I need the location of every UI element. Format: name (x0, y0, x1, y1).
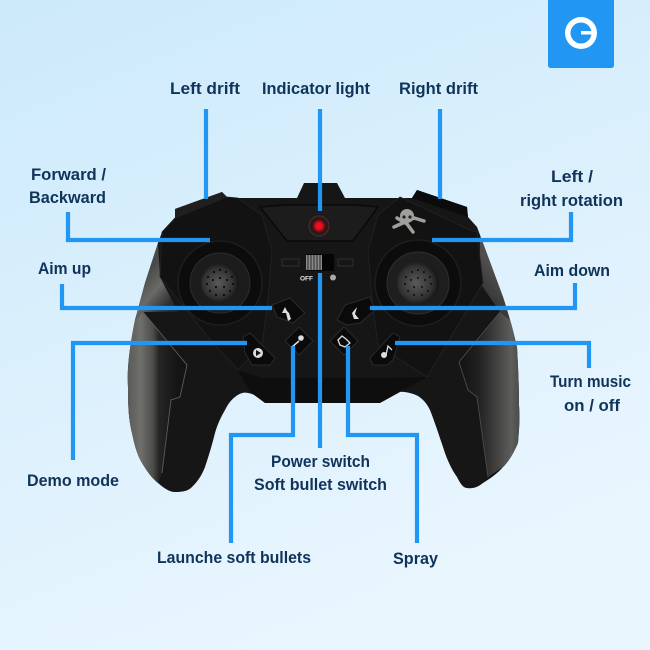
connector: aim up (62, 284, 272, 308)
left grip lower panel (128, 312, 187, 483)
skull and crossbones emblem (394, 209, 424, 232)
game controller (128, 183, 519, 492)
label: left / right rotation: right rotation (520, 191, 623, 210)
spray button (330, 327, 358, 355)
right grip trim line (459, 312, 500, 477)
power switch (282, 254, 353, 282)
connector: power switch (318, 273, 322, 448)
music button (370, 333, 400, 365)
right grip upper panel (480, 235, 510, 320)
label: power switch and soft bullet switch: Soft bullet switch (254, 475, 387, 494)
right joystick (375, 240, 461, 326)
label: spray: Spray (393, 549, 439, 568)
logo badge (548, 0, 614, 68)
lower centre band (238, 370, 427, 403)
controller silhouette (128, 183, 519, 492)
left grip upper panel (135, 243, 178, 320)
connector: spray (348, 346, 417, 543)
label: power switch and soft bullet switch: Power switch (271, 452, 370, 471)
connector: demo mode (73, 343, 247, 460)
connector: right drift (438, 109, 442, 199)
label: indicator light: Indicator light (262, 79, 370, 98)
connector: left drift (204, 109, 208, 199)
label: power switch and soft bullet switch (254, 452, 387, 494)
indicator light (309, 216, 329, 236)
left grip trim line (143, 312, 187, 473)
label: forward / backward: Forward / (31, 165, 106, 184)
label: turn music on / off (550, 372, 631, 415)
left joystick (178, 241, 262, 325)
right grip lower panel (459, 312, 519, 477)
label: aim up: Aim up (38, 259, 91, 278)
label: left drift: Left drift (170, 79, 240, 98)
left faceplate (160, 197, 272, 370)
label: left / right rotation (520, 167, 623, 210)
label: left / right rotation: Left / (551, 167, 593, 186)
right faceplate (368, 197, 483, 377)
connector: turn music on / off (395, 343, 589, 368)
label: aim down: Aim down (534, 261, 610, 280)
demo mode button (243, 333, 275, 365)
label: right drift: Right drift (399, 79, 478, 98)
label: launche soft bullets: Launche soft bullets (157, 548, 311, 567)
connector: forward / backward (68, 212, 210, 240)
aim up button (272, 298, 305, 323)
connector: left / right rotation (432, 212, 571, 240)
label: turn music on / off: on / off (564, 396, 620, 415)
label: turn music on / off: Turn music (550, 372, 631, 391)
aim down button (337, 297, 375, 325)
label: forward / backward: Backward (29, 188, 106, 207)
left shoulder button (175, 192, 227, 218)
right shoulder button (412, 190, 468, 217)
connector: indicator light (318, 109, 322, 211)
launch soft bullets button (285, 327, 313, 355)
label: forward / backward (29, 165, 106, 207)
connector: aim down (370, 283, 575, 308)
label: demo mode: Demo mode (27, 471, 119, 490)
centre faceplate (260, 205, 378, 241)
power switch: OFF (300, 276, 313, 282)
connector: launch soft bullets (231, 346, 293, 543)
